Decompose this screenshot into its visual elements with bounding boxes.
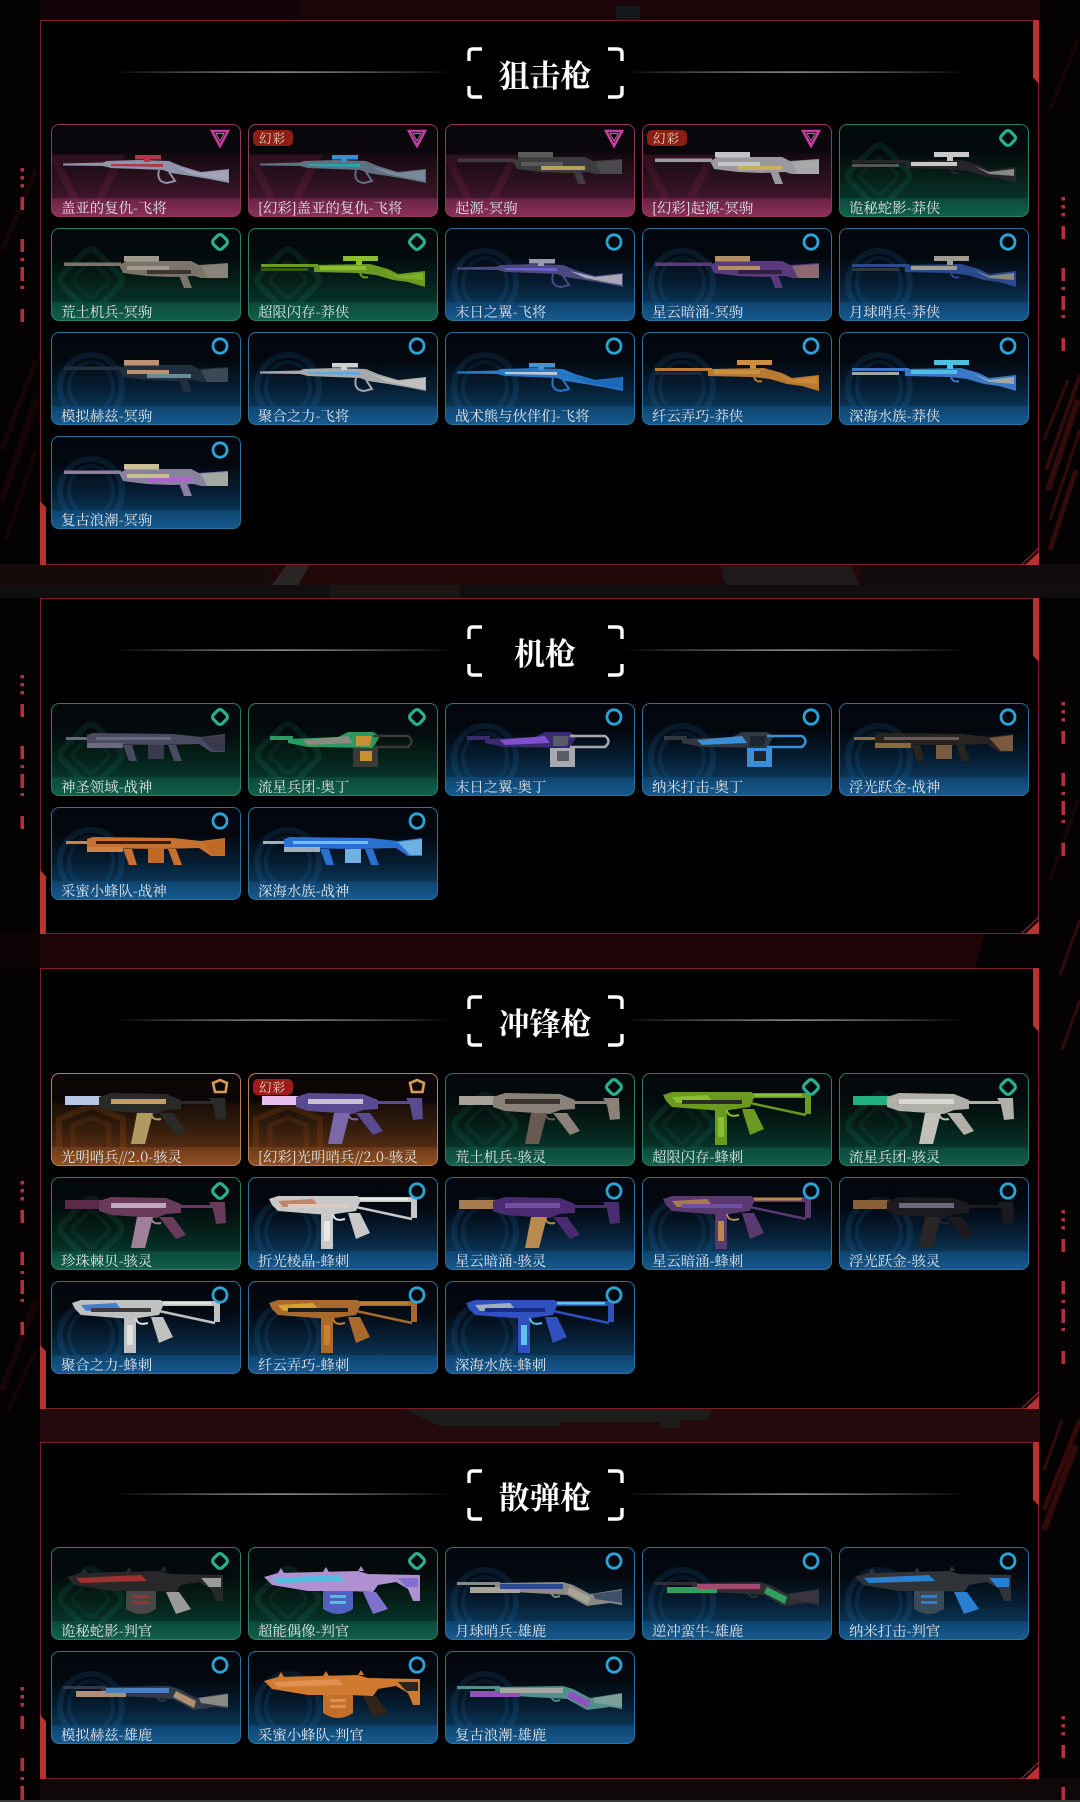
gun: 纤云弄巧 [655,360,819,391]
gun: 光明哨兵 [51,1073,241,1166]
card: [幻彩]光明哨兵//2.0-骇灵 [248,1073,438,1166]
card: 月球哨兵-莽侠 [839,228,1029,321]
gun: 幻彩起源 [655,152,819,184]
icon: rarity ring [406,1655,428,1675]
card: 折光棱晶-蜂刺 [248,1177,438,1270]
heading: 冲锋枪 [118,995,962,1047]
gun: 深海水族 [248,807,438,900]
card: 超限闪存-莽侠 [248,228,438,321]
gun: 模拟赫兹 [51,1651,241,1744]
card: 荒土机兵-冥驹 [51,228,241,321]
icon: rarity diamond [209,1551,231,1571]
card: 盖亚的复仇-飞将 [51,124,241,217]
card: 月球哨兵-雄鹿 [445,1547,635,1640]
card: 超能偶像-判官 [248,1547,438,1640]
heading: 狙击枪: 狙击枪 [498,51,592,96]
badge: 幻彩 [259,1078,286,1096]
card: 末日之翼-奥丁 [445,703,635,796]
icon: rarity ring [212,337,228,355]
icon: rarity ring [997,1551,1019,1571]
icon: rarity ring [603,1285,625,1305]
gun: 流星兵团 [839,1073,1029,1166]
card: 神圣领域-战神 [51,703,241,796]
heading: 狙击枪 [118,47,962,99]
card: 复古浪潮-冥驹 [51,436,241,529]
gun: 复古浪潮 [64,464,228,496]
icon: rarity ring [802,337,820,355]
gun: 浮光跃金 [839,703,1029,796]
card: 超限闪存-蜂刺 [642,1073,832,1166]
gun: 幻彩光明哨兵 [248,1073,438,1166]
icon: rarity ring [1000,233,1016,251]
gun: 超限闪存 [642,1073,832,1166]
gun: 末日之翼 [457,259,623,288]
icon: rarity diamond [211,233,229,251]
icon: rarity ring [406,1285,428,1305]
gun: 诡秘蛇影 [852,152,1016,183]
icon: rarity ring [997,707,1019,727]
icon: rarity diamond [209,1181,231,1201]
gun: 月球哨兵 [445,1547,635,1640]
gun: 盖亚的复仇 [63,155,229,184]
icon: rarity diamond [408,233,426,251]
gun: 采蜜小蜂队 [51,807,241,900]
icon: rarity ring [603,707,625,727]
gun: 采蜜小蜂队 [248,1651,438,1744]
badge: 幻彩 [653,128,680,146]
icon: rarity diamond [211,708,229,726]
gun: 深海水族 [445,1281,635,1374]
card: [幻彩]盖亚的复仇-飞将 [248,124,438,217]
gun: 荒土机兵 [445,1073,635,1166]
icon: rarity diamond [800,1077,822,1097]
icon: rarity triangle [604,130,624,148]
card: 聚合之力-飞将 [248,332,438,425]
heading: 机枪 [118,625,961,677]
gun: 星云暗涌 [445,1177,635,1270]
icon: rarity diamond [999,129,1017,147]
card: 光明哨兵//2.0-骇灵 [51,1073,241,1166]
badge: 幻彩 [259,128,286,146]
gun: 幻彩盖亚的复仇 [260,155,426,184]
gun: 末日之翼 [445,703,635,796]
panel: 狙击枪 [40,20,1039,565]
badge [252,130,292,146]
panel: 散弹枪 [40,1442,1039,1779]
gun: 复古浪潮 [445,1651,635,1744]
icon: rarity diamond [997,1077,1019,1097]
gun: 纳米打击 [839,1547,1029,1640]
gun: 神圣领域 [66,733,225,761]
icon: rarity diamond [408,708,426,726]
icon: rarity ring [603,1655,625,1675]
icon: rarity ring [408,337,426,355]
gun: 月球哨兵 [852,256,1016,287]
card: 诡秘蛇影-判官 [51,1547,241,1640]
gun: 模拟赫兹 [64,360,228,392]
card: 流星兵团-骇灵 [839,1073,1029,1166]
card: 珍珠棘贝-骇灵 [51,1177,241,1270]
icon: rarity ring [406,811,428,831]
icon: rarity ring [209,1655,231,1675]
card: 纳米打击-判官 [839,1547,1029,1640]
card: 起源-冥驹 [445,124,635,217]
badge [252,1078,292,1094]
icon: rarity ring [802,233,820,251]
icon: rarity ring [800,1551,822,1571]
card: 荒土机兵-骇灵 [445,1073,635,1166]
gun: 超能偶像 [248,1547,438,1640]
card: 星云暗涌-骇灵 [445,1177,635,1270]
card: 采蜜小蜂队-战神 [51,807,241,900]
card: 流星兵团-奥丁 [248,703,438,796]
card: 模拟赫兹-雄鹿 [51,1651,241,1744]
card: 采蜜小蜂队-判官 [248,1651,438,1744]
icon: rarity ring [1000,337,1016,355]
card: 深海水族-莽侠 [839,332,1029,425]
gun: 浮光跃金 [839,1177,1029,1270]
icon: rarity ring [406,1181,428,1201]
icon: rarity triangle [406,130,428,148]
icon: rarity triangle [210,130,230,148]
card: 末日之翼-飞将 [445,228,635,321]
card: 深海水族-蜂刺 [445,1281,635,1374]
card: 聚合之力-蜂刺 [51,1281,241,1374]
icon: rarity ring [603,1181,625,1201]
gun: 逆冲蛮牛 [642,1547,832,1640]
gun: 战术熊与伙伴们 [457,363,623,392]
icon: rarity pentagon [209,1077,231,1097]
card: [幻彩]起源-冥驹 [642,124,832,217]
card: 纤云弄巧-蜂刺 [248,1281,438,1374]
gun: 纳米打击 [642,703,832,796]
card: 浮光跃金-战神 [839,703,1029,796]
icon: rarity pentagon [406,1077,428,1097]
gun: 星云暗涌 [642,1177,832,1270]
card: 浮光跃金-骇灵 [839,1177,1029,1270]
icon: rarity ring [800,1181,822,1201]
panel: 机枪 [40,598,1039,934]
icon: rarity ring [606,233,622,251]
heading: 机枪: 机枪 [514,629,576,674]
card: 深海水族-战神 [248,807,438,900]
card: 诡秘蛇影-莽侠 [839,124,1029,217]
gun: 纤云弄巧 [248,1281,438,1374]
gun: 流星兵团 [270,732,413,767]
gun: 超限闪存 [261,256,425,287]
card: 星云暗涌-蜂刺 [642,1177,832,1270]
gun: 星云暗涌 [655,256,819,288]
card: 模拟赫兹-冥驹 [51,332,241,425]
icon: rarity ring [209,811,231,831]
icon: rarity diamond [406,1551,428,1571]
heading: 散弹枪: 散弹枪 [498,1473,592,1518]
icon: rarity ring [212,441,228,459]
icon: rarity triangle [800,130,822,148]
card: 战术熊与伙伴们-飞将 [445,332,635,425]
gun: 起源 [458,152,622,184]
card: 星云暗涌-冥驹 [642,228,832,321]
card: 复古浪潮-雄鹿 [445,1651,635,1744]
card: 纳米打击-奥丁 [642,703,832,796]
badge [646,130,686,146]
gun: 聚合之力 [51,1281,241,1374]
gun: 珍珠棘贝 [51,1177,241,1270]
icon: rarity ring [997,1181,1019,1201]
panel: 冲锋枪 [40,968,1039,1409]
icon: rarity diamond [603,1077,625,1097]
gun: 深海水族 [852,360,1016,391]
icon: rarity ring [603,1551,625,1571]
icon: rarity ring [209,1285,231,1305]
card: 纤云弄巧-莽侠 [642,332,832,425]
gun: 诡秘蛇影 [51,1547,241,1640]
gun: 聚合之力 [260,363,426,392]
heading: 散弹枪 [118,1469,961,1521]
gun: 折光棱晶 [248,1177,438,1270]
card: 逆冲蛮牛-雄鹿 [642,1547,832,1640]
gun: 荒土机兵 [64,256,228,288]
heading: 冲锋枪: 冲锋枪 [498,999,592,1044]
icon: rarity ring [800,707,822,727]
icon: rarity ring [606,337,622,355]
